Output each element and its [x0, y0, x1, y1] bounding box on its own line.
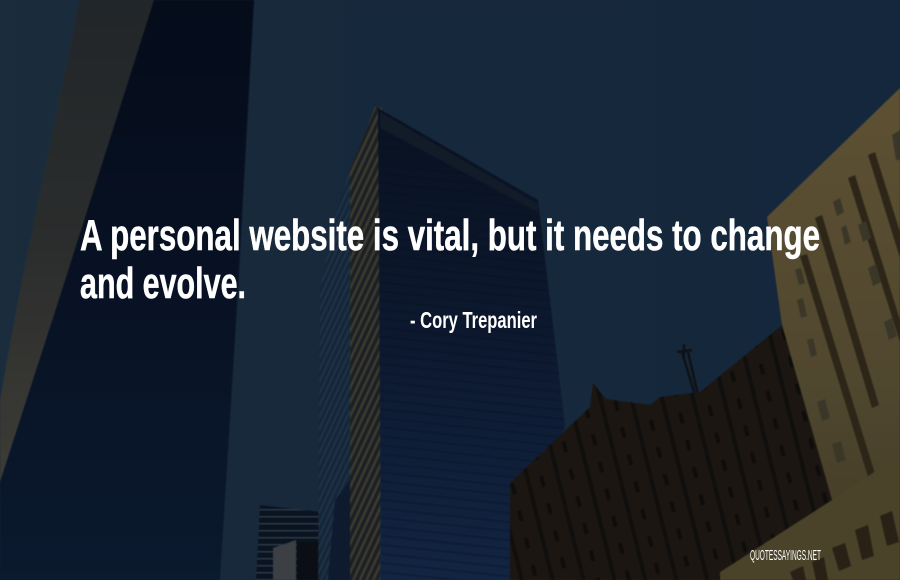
yellow building right	[720, 88, 900, 580]
attribution: - Cory Trepanier	[410, 307, 537, 333]
brown building	[510, 325, 832, 580]
small distant building	[256, 505, 330, 580]
central skyscraper	[318, 107, 565, 580]
antenna	[677, 344, 698, 395]
small windows	[795, 130, 900, 463]
beige skyscraper left	[0, 0, 155, 482]
quote text	[80, 211, 820, 308]
dark window strips	[800, 152, 900, 480]
dark skyscraper left	[0, 0, 254, 580]
lower wing	[720, 455, 900, 580]
quote text: and evolve.	[80, 259, 246, 308]
